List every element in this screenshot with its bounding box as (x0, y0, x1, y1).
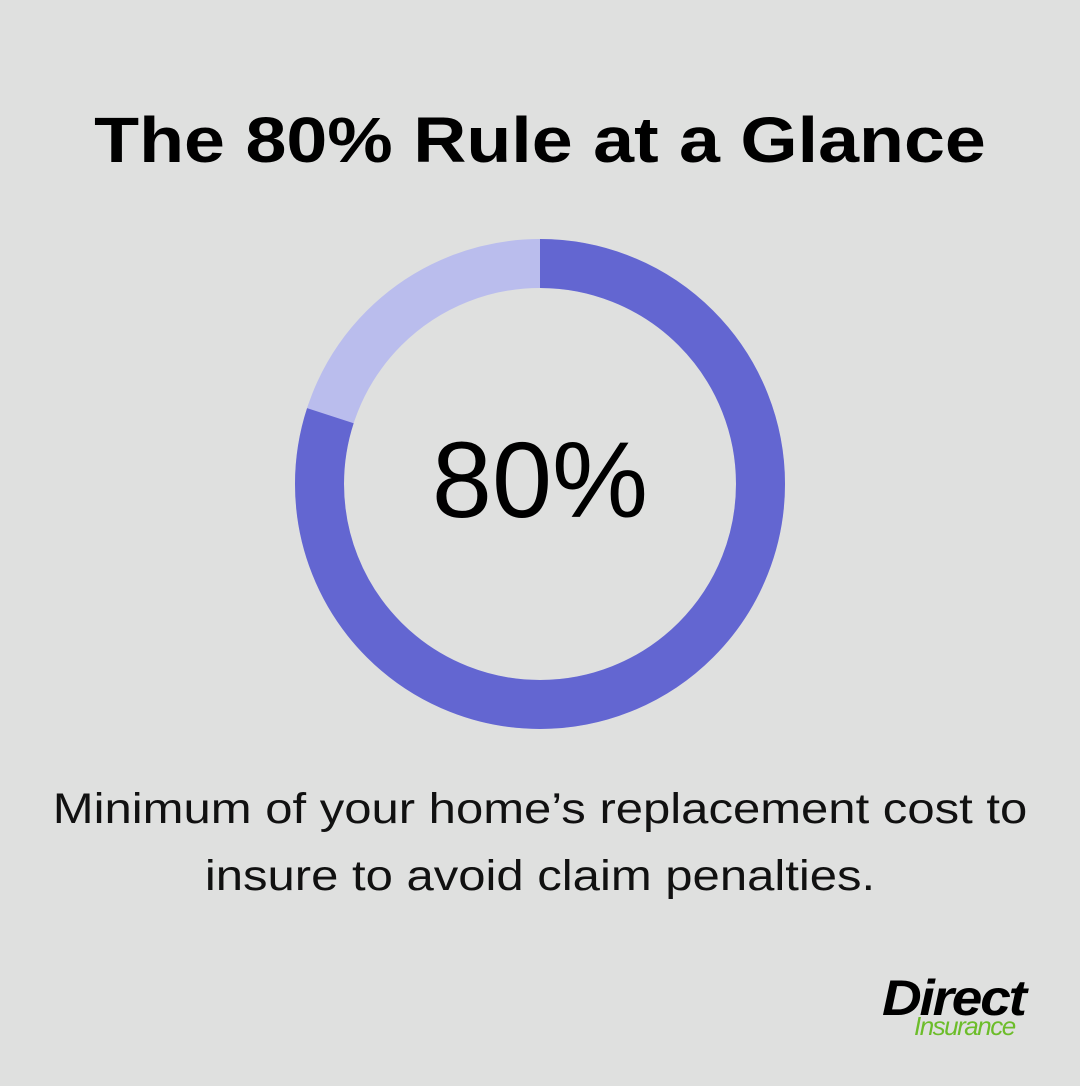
stat value: 80% (432, 419, 648, 540)
caption: Minimum of your home’s replacement cost to (53, 785, 1027, 833)
title: The 80% Rule at a Glance (94, 104, 986, 176)
caption (53, 785, 1027, 900)
logo: Direct (882, 970, 1025, 1026)
logo: Insurance (914, 1011, 1015, 1041)
caption: insure to avoid claim penalties. (205, 852, 875, 900)
